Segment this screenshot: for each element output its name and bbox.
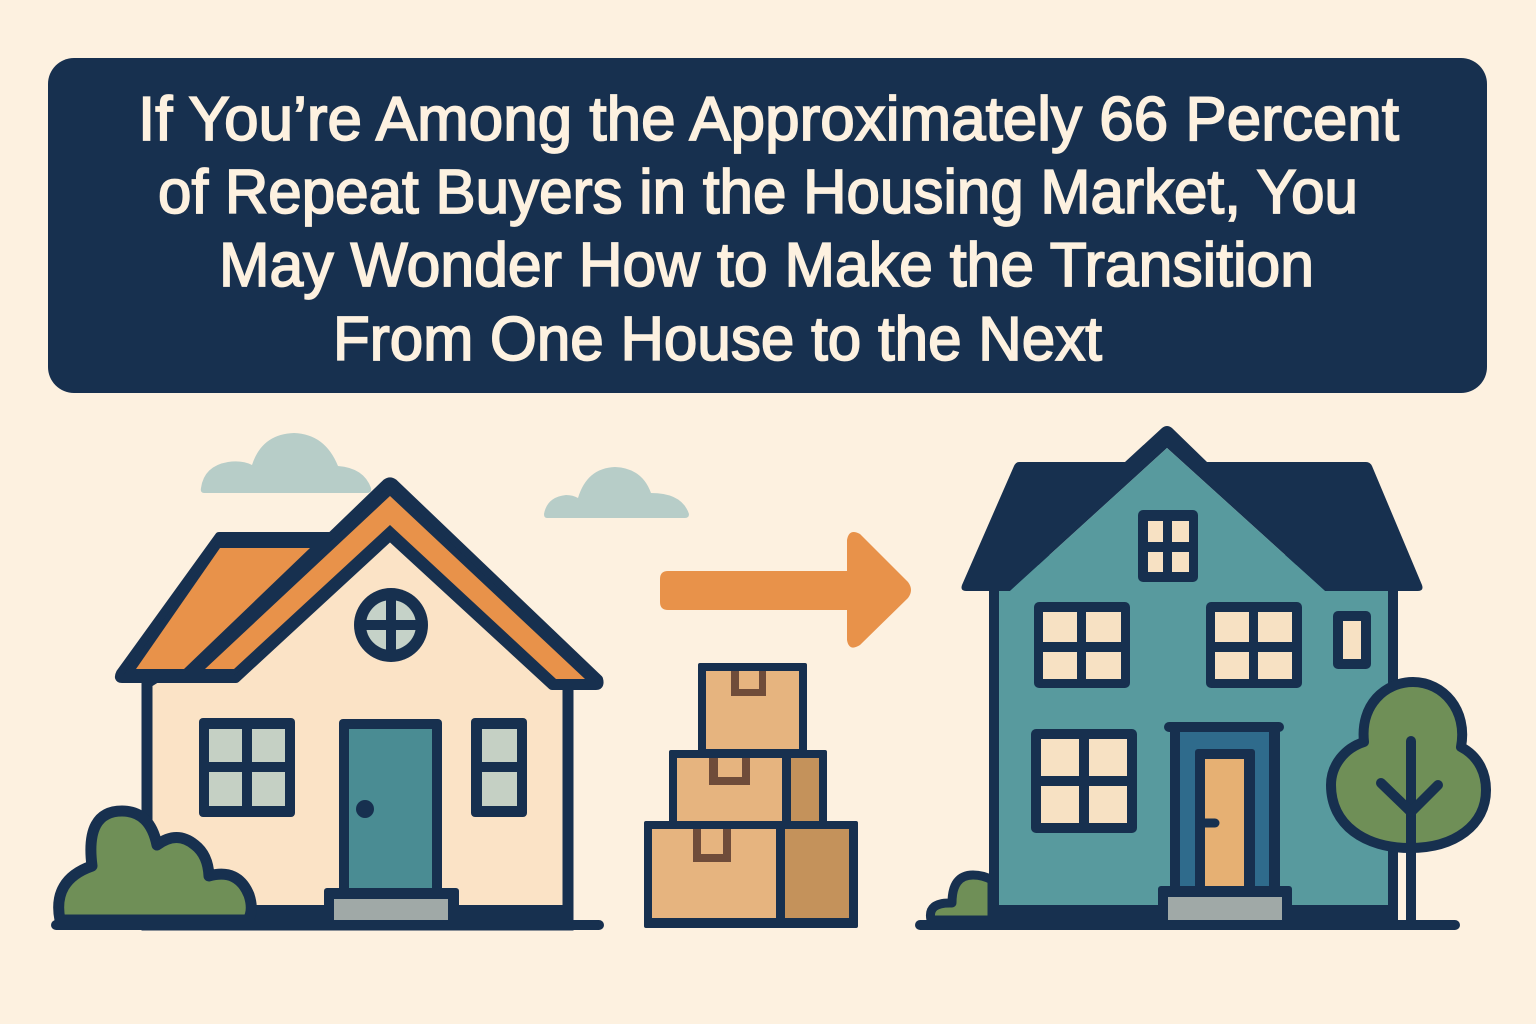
small side window [1333,611,1371,669]
ground right [915,920,1460,930]
wall base [142,905,573,930]
teal gable [1010,448,1325,591]
middle box [669,750,827,828]
small bush behind large house [930,875,992,920]
wall base [989,905,1398,930]
orange left roof [136,548,310,669]
cloud left [201,433,371,493]
small house [119,482,600,930]
title banner: of Repeat Buyers in the Housing Market, You [158,158,1358,227]
top box [698,663,807,758]
large house [962,426,1422,930]
orange front roof [205,496,585,679]
title banner [48,58,1487,393]
title banner: May Wonder How to Make the Transition [219,231,1314,300]
arrow [660,532,911,648]
round window [354,588,428,662]
title banner: From One House to the Next [333,305,1102,374]
doorstep [1158,886,1292,926]
roof outline [119,482,600,686]
house wall [147,530,568,925]
bottom box [644,821,858,928]
upper left window [1034,602,1130,688]
dark roof [962,426,1422,591]
boxes [644,663,858,928]
cloud right [544,467,689,518]
house body [994,560,1393,925]
doorstep [324,888,459,926]
bush left [59,811,251,920]
ground left [51,920,604,930]
upper right window [1206,602,1302,688]
lower left window [1031,729,1137,833]
tree [1331,682,1486,920]
door [339,719,442,894]
left window [199,718,295,817]
door and frame [1164,722,1284,890]
title banner: If You’re Among the Approximately 66 Percent [138,85,1399,154]
right window [471,718,527,817]
attic window [1138,510,1198,582]
